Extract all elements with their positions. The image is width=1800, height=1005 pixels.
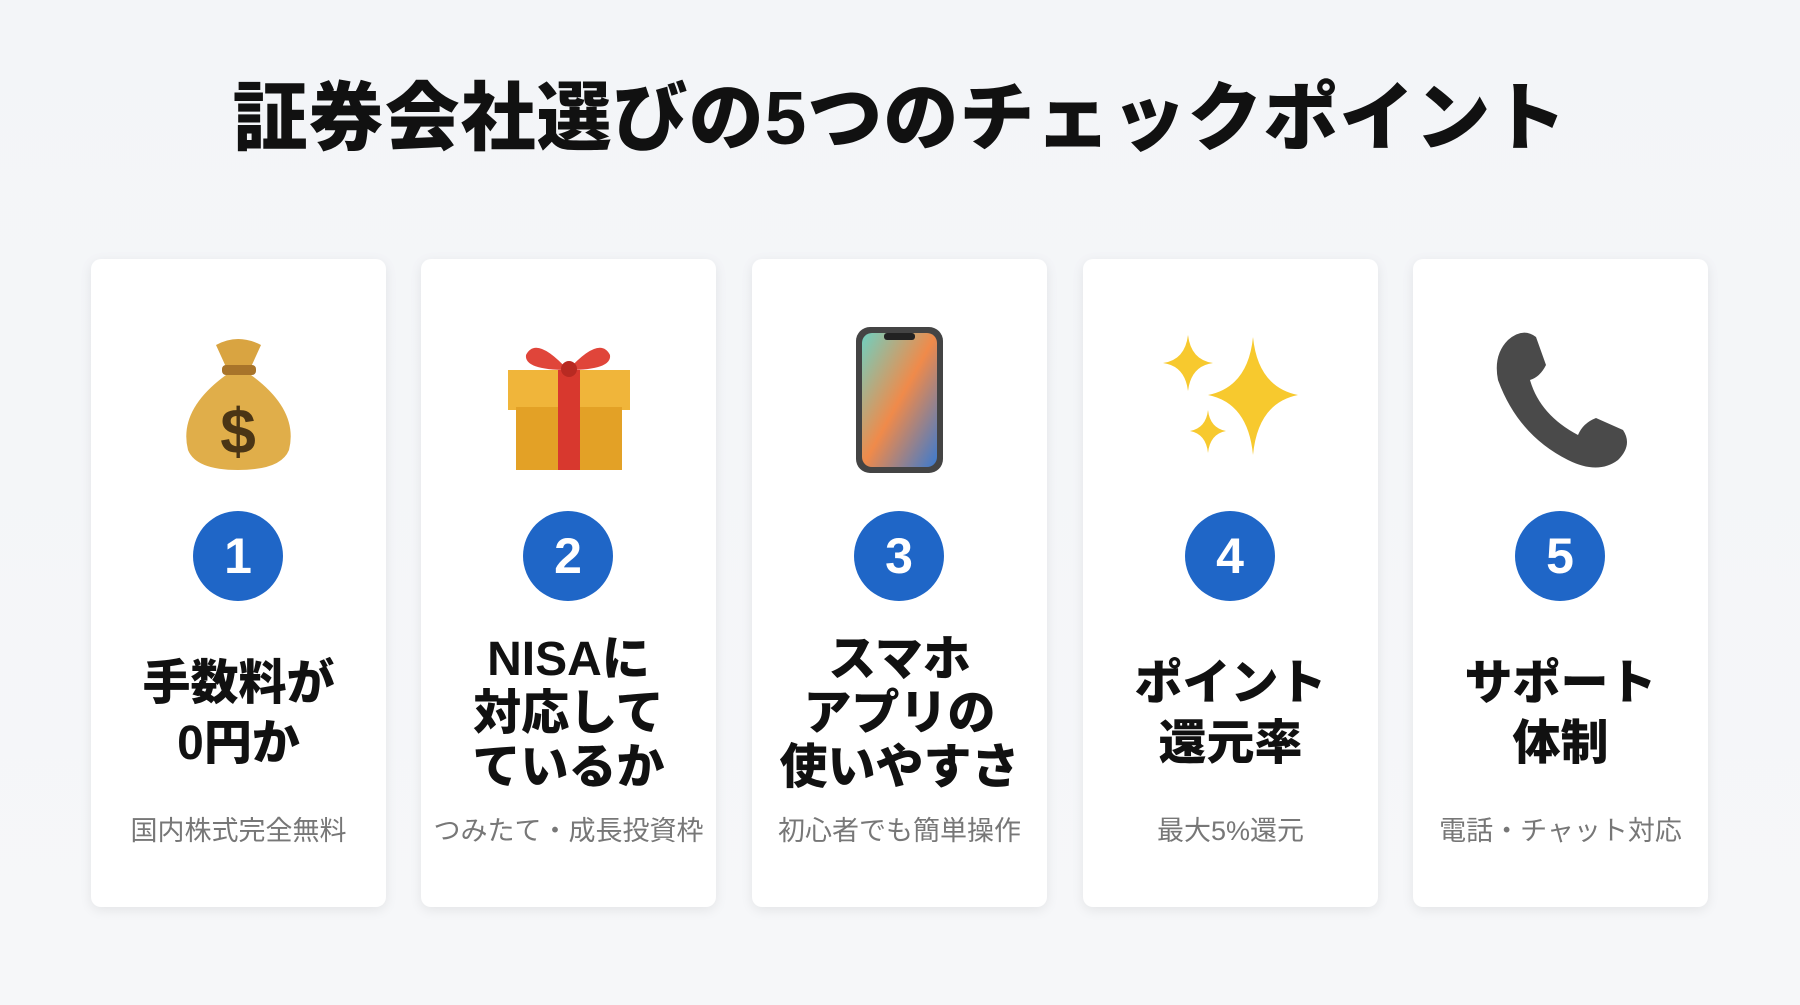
- heading: アプリの: [803, 687, 996, 740]
- number 5: 5: [1546, 528, 1574, 584]
- heading: 対応して: [473, 687, 664, 740]
- heading: ポイント: [1134, 657, 1326, 710]
- subtext: 初心者でも簡単操作: [778, 816, 1021, 846]
- icon: money bag: $: [220, 395, 256, 467]
- icon: sparkles: [1163, 335, 1298, 455]
- panel: card 2: [421, 259, 716, 907]
- heading: 体制: [1512, 717, 1608, 770]
- subtext: 電話・チャット対応: [1439, 816, 1682, 846]
- number 3: [854, 511, 944, 601]
- number 4: 4: [1216, 528, 1244, 584]
- heading: 手数料が: [142, 657, 334, 710]
- panel: card 5: [1413, 259, 1708, 907]
- heading: NISAに: [487, 633, 650, 686]
- number 5: [1515, 511, 1605, 601]
- subtext: 最大5%還元: [1157, 816, 1304, 846]
- title: 証券会社選びの5つのチェックポイント: [233, 76, 1567, 160]
- panel: card 3: [752, 259, 1047, 907]
- icon: smartphone: [856, 327, 943, 473]
- number 1: [193, 511, 283, 601]
- number 4: [1185, 511, 1275, 601]
- icon: telephone: [1496, 332, 1627, 468]
- panel: card 1: [91, 259, 386, 907]
- heading: [779, 633, 1020, 794]
- heading: 0円か: [177, 717, 300, 770]
- heading: 還元率: [1158, 717, 1302, 770]
- heading: [472, 633, 664, 794]
- heading: [142, 656, 334, 770]
- icon: gift: [508, 348, 630, 470]
- icon: money bag: [186, 339, 291, 470]
- heading: スマホ: [828, 633, 971, 686]
- number 2: [523, 511, 613, 601]
- heading: [1134, 657, 1326, 770]
- number 2: 2: [554, 528, 582, 584]
- number 3: 3: [885, 528, 913, 584]
- heading: ているか: [472, 741, 664, 794]
- panel: card 4: [1083, 259, 1378, 907]
- heading: サポート: [1464, 657, 1656, 710]
- heading: 使いやすさ: [779, 741, 1020, 794]
- heading: [1464, 657, 1656, 770]
- subtext: 国内株式完全無料: [130, 816, 346, 846]
- number 1: 1: [224, 528, 252, 584]
- subtext: つみたて・成長投資枠: [434, 816, 704, 846]
